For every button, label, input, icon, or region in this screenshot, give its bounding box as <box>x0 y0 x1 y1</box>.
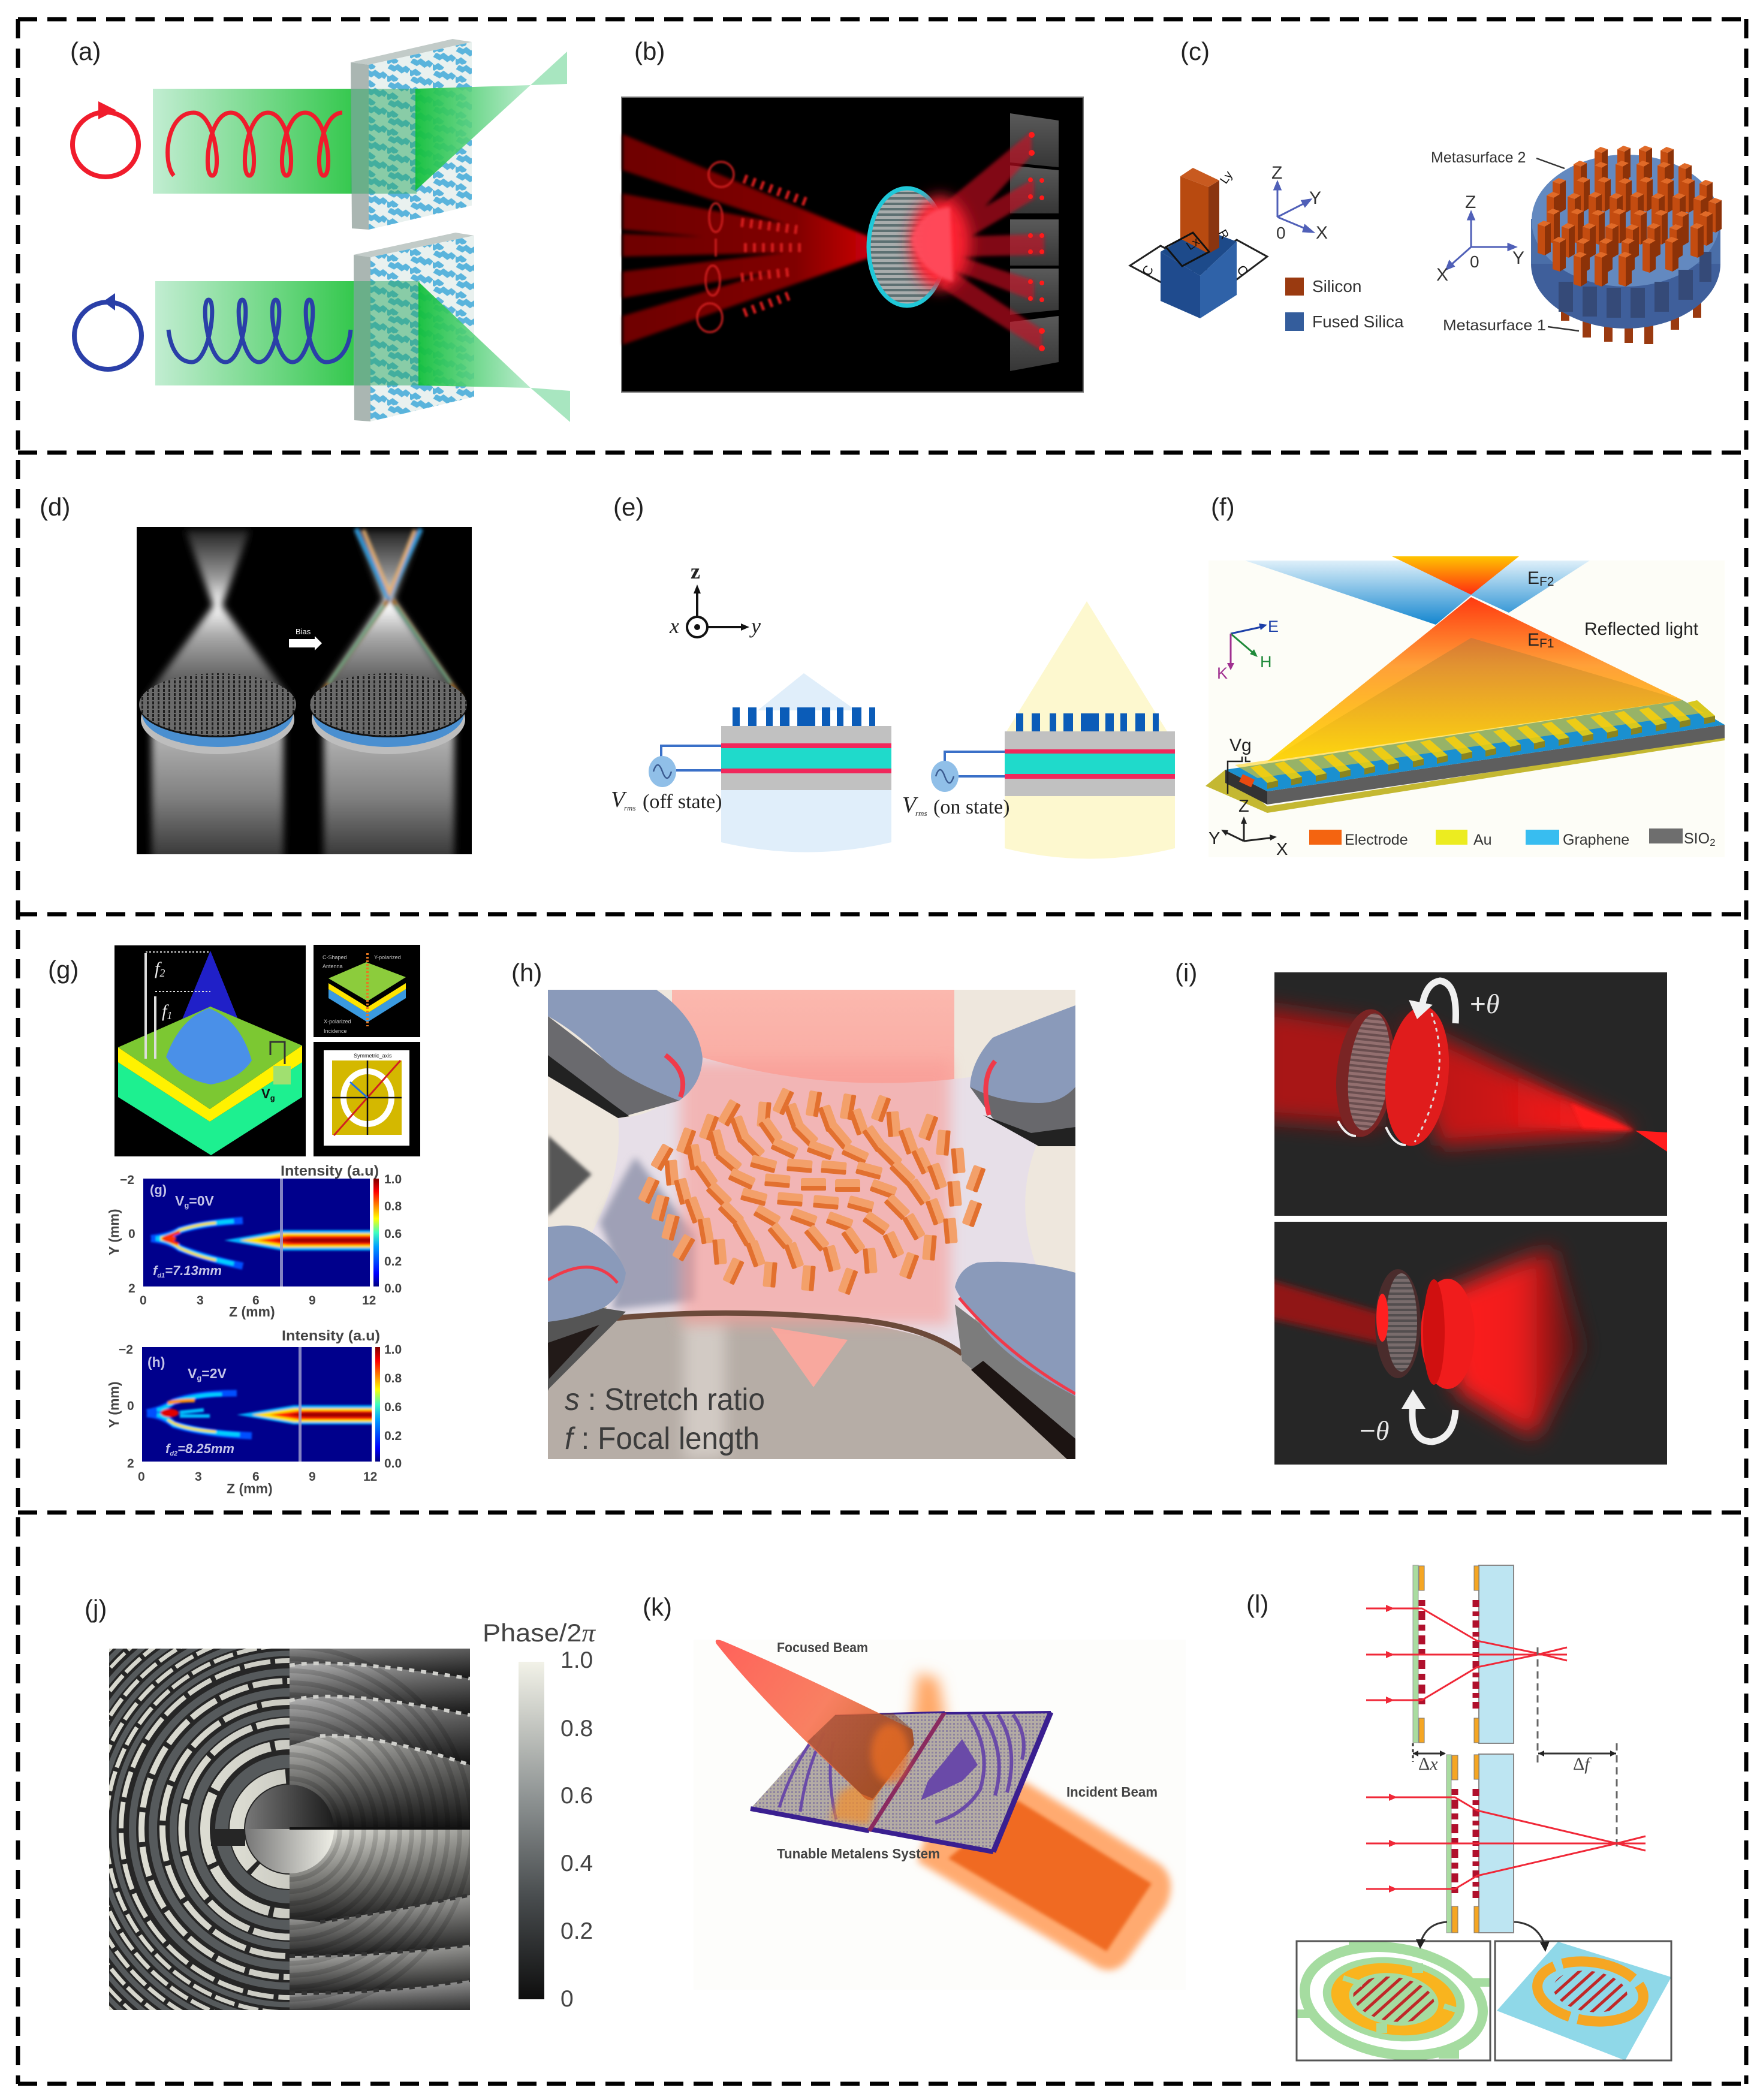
heatmap: Vg 0V: d1 <box>157 1272 165 1279</box>
on-state label: rms <box>915 809 927 818</box>
incident beams <box>152 728 284 866</box>
panel: (l) MEMS doublet metalens <box>1246 1565 1671 2069</box>
heatmap: Vg 0V <box>143 1179 372 1286</box>
inset: C-shaped antenna: Incidence <box>324 1028 347 1034</box>
pink focus triangle <box>771 1327 848 1387</box>
right half concentric shading <box>107 1647 472 2011</box>
heatmap: Vg 2V: V <box>188 1366 197 1381</box>
inset: C-shaped antenna: Antenna <box>323 963 343 969</box>
inset: fixed lens <box>1495 1941 1671 2060</box>
inset: C-shaped antenna: X-polarized <box>324 1019 351 1025</box>
unit cell: C <box>1234 262 1252 279</box>
E H K axes <box>1217 617 1279 682</box>
label d: (d) <box>40 493 70 521</box>
film shadow <box>599 1157 695 1310</box>
colorbar and axes for first heatmap: 0 <box>140 1294 147 1307</box>
dome <box>166 1008 252 1084</box>
top image +theta <box>1259 972 1667 1216</box>
colorbar and axes for first heatmap: 0.6 <box>384 1227 402 1241</box>
colorbar and axes for first heatmap: 0.0 <box>384 1282 402 1295</box>
heatmap: Vg 0V: (g) <box>150 1182 167 1197</box>
off-state label: rms <box>624 803 636 812</box>
on-state device <box>931 601 1175 858</box>
colorbar and axes for second heatmap: 12 <box>363 1470 377 1484</box>
legend: Au <box>1473 831 1492 848</box>
main 3D device on black: g <box>270 1093 275 1102</box>
main 3D device on black: V <box>261 1086 270 1101</box>
colorbar and axes for second heatmap: 3 <box>195 1470 202 1484</box>
legend: Electrode <box>1345 831 1408 848</box>
inset: C-shaped antenna <box>314 945 420 1037</box>
colorbar and axes for second heatmap: Z (mm) <box>227 1481 273 1496</box>
colorbar and axes for first heatmap: 0.2 <box>384 1255 402 1269</box>
legend: Fused Silica <box>1312 312 1404 331</box>
orange glow through plate <box>871 1724 909 1783</box>
coordinate axes left: Y <box>1309 188 1321 208</box>
colorbar and axes for first heatmap: 6 <box>252 1294 260 1307</box>
colorbar and axes for first heatmap: Y (mm) <box>106 1209 122 1255</box>
coordinate axes left <box>1271 163 1328 243</box>
colorbar and axes for second heatmap: 0 <box>127 1399 134 1413</box>
right output cone <box>314 530 463 700</box>
coordinate axes right: Y <box>1512 248 1524 268</box>
top rays <box>1366 1608 1567 1700</box>
E H K axes: E <box>1268 617 1279 635</box>
unit cell <box>1130 168 1267 318</box>
clamp bottom left <box>548 1225 626 1391</box>
bottom image -theta <box>1259 1222 1667 1465</box>
polarisation ellipses and waves <box>697 162 808 332</box>
left metalens disc <box>139 673 296 754</box>
displacement dimensions: Δf <box>1573 1754 1592 1774</box>
upper focused output beam <box>351 52 567 194</box>
curved arrows to insets <box>1416 1922 1550 1952</box>
right half upper phase bands <box>290 1649 470 1829</box>
heatmap: Vg 2V: d2 <box>170 1450 177 1457</box>
metalens nano-bricks <box>638 1087 986 1295</box>
axes x y z: z <box>691 559 700 583</box>
inset: C-shaped antenna: C-Shaped <box>323 954 347 960</box>
main 3D device on black <box>114 945 306 1156</box>
coordinate axes left: Z <box>1271 163 1282 183</box>
clamp bottom right <box>955 1262 1075 1459</box>
colorbar labels <box>483 1619 596 2012</box>
main 3D device on black: 1 <box>167 1010 172 1022</box>
blue helix wave <box>168 300 351 362</box>
colorbar and axes for second heatmap: 6 <box>252 1470 260 1484</box>
colorbar labels: 0.2 <box>560 1918 593 1944</box>
upper green beam <box>153 89 354 194</box>
focal length text: f : Focal length <box>565 1421 760 1456</box>
colorbar labels: 0.8 <box>560 1716 593 1742</box>
orange upper cone <box>1392 556 1519 595</box>
clamp top right <box>970 1005 1075 1146</box>
phase map <box>35 1575 544 2083</box>
coordinate axes right: 0 <box>1470 252 1479 271</box>
legend <box>1285 277 1404 331</box>
stretched film scene <box>548 990 1075 1459</box>
on-state label: V <box>902 793 918 818</box>
coordinate axes left: X <box>1316 223 1328 243</box>
label b: (b) <box>634 37 665 65</box>
label c: (c) <box>1180 37 1210 65</box>
panel: (d) achromatic metalens bias <box>40 493 472 866</box>
faint background <box>694 1640 1186 1990</box>
unit cell: Lx <box>1184 235 1202 253</box>
focal spots <box>1028 132 1045 351</box>
colorbar and axes for first heatmap: Intensity (a.u) <box>281 1163 379 1179</box>
colorbar and axes for first heatmap: 0 <box>128 1227 135 1241</box>
panel: (f) graphene reflective metalens <box>1206 493 1725 859</box>
colorbar and axes for second heatmap: 0.0 <box>384 1457 402 1471</box>
colorbar and axes for second heatmap: 2 <box>127 1457 134 1471</box>
label h: (h) <box>511 959 542 987</box>
E H K axes: K <box>1217 664 1228 682</box>
film lower edge <box>557 1313 962 1354</box>
device slab <box>118 1062 302 1155</box>
bottom image -theta: −θ <box>1360 1415 1389 1446</box>
legend: Graphene <box>1563 831 1629 848</box>
inset: MEMS actuator lens <box>1296 1933 1491 2069</box>
E H K axes: H <box>1260 653 1272 671</box>
inset: antenna geometry <box>314 1042 420 1156</box>
off-state label <box>611 787 722 813</box>
off-state label: (off state) <box>643 791 722 813</box>
on-state label: (on state) <box>933 796 1009 818</box>
off-state label: V <box>611 787 627 812</box>
axes x y z: x <box>669 614 679 638</box>
stretch ratio text: s : Stretch ratio <box>565 1382 765 1417</box>
main 3D device on black: f <box>162 1001 167 1021</box>
displacement dimensions <box>1413 1647 1617 1851</box>
EF1 label: F1 <box>1539 637 1554 650</box>
legend: 2 <box>1710 837 1716 848</box>
colorbar and axes for second heatmap: 0.8 <box>384 1372 402 1385</box>
top image +theta: +θ <box>1470 988 1499 1019</box>
colorbar labels: Phase/2 π <box>483 1619 596 1647</box>
panel: (e) liquid crystal metalens states <box>611 493 1175 858</box>
label l: (l) <box>1246 1590 1268 1618</box>
axes x y z <box>669 559 761 638</box>
screens with focal spots <box>1010 113 1059 371</box>
lower metasurface plate <box>354 233 474 421</box>
colorbar and axes for first heatmap: 0.8 <box>384 1200 402 1213</box>
panel: (b) multi-focus metalens on black <box>622 37 1083 392</box>
dark wedge <box>548 1135 592 1216</box>
metasurface 2 callout: Metasurface 2 <box>1431 149 1526 166</box>
panel: (i) rotating Moire metalens <box>1175 959 1667 1465</box>
EF1 label: E <box>1527 630 1539 650</box>
left half concentric phase rings <box>35 1575 544 2083</box>
blue reflected cone <box>1245 561 1590 625</box>
lower focused output beam <box>354 281 570 422</box>
sawtooth boundaries <box>290 1663 470 1993</box>
heatmap: Vg 2V <box>142 1347 375 1462</box>
heatmap: Vg 2V: (h) <box>147 1354 165 1370</box>
upper metasurface plate <box>351 39 472 230</box>
legend <box>1309 828 1716 848</box>
metasurface cylinder <box>1531 146 1722 344</box>
Vg electrode <box>1228 736 1252 794</box>
background <box>548 990 1075 1459</box>
colorbar and axes for first heatmap: 12 <box>362 1294 376 1307</box>
unit cell: C <box>1139 263 1156 278</box>
upper pillars <box>1538 146 1722 287</box>
heatmap: Vg 2V: g <box>197 1373 201 1382</box>
coordinate axes left: 0 <box>1276 224 1286 242</box>
colorbar and axes for second heatmap: 1.0 <box>384 1343 402 1357</box>
colorbar and axes for first heatmap <box>106 1163 402 1319</box>
bias arrow: Bias <box>296 627 311 636</box>
colorbar and axes for first heatmap: −2 <box>120 1173 134 1187</box>
XYZ axes: Z <box>1238 797 1249 816</box>
incident red beams <box>623 134 869 345</box>
rainbow dispersion edges <box>318 529 462 698</box>
label j: (j) <box>85 1595 107 1623</box>
clamp top left <box>548 990 703 1118</box>
colorbar and axes for first heatmap: Z (mm) <box>229 1304 275 1319</box>
colorbar and axes for second heatmap: 0 <box>138 1470 145 1484</box>
reflective device <box>1206 700 1725 813</box>
lower pillars <box>1561 294 1701 344</box>
label i: (i) <box>1175 959 1197 987</box>
Vg electrode: Vg <box>1229 736 1252 755</box>
panel: (j) phase profile <box>35 1575 596 2083</box>
heatmap: Vg 0V: f <box>153 1263 157 1278</box>
inset: antenna geometry: Symmetric_axis <box>354 1053 392 1059</box>
cream background <box>1209 561 1725 857</box>
panel: (c) bilayer metasurface schematic <box>1130 37 1722 344</box>
metasurface 2 callout <box>1431 149 1565 168</box>
right half lower phase bands <box>290 1829 470 2010</box>
output red ray bundles <box>941 131 1044 351</box>
beam labels: Focused Beam <box>777 1640 868 1655</box>
EF2 label: E <box>1527 568 1539 588</box>
label e: (e) <box>613 493 644 521</box>
left output cone <box>143 530 292 700</box>
colorbar labels: 0.4 <box>560 1851 593 1876</box>
heatmap: Vg 2V: =8.25mm <box>177 1441 234 1456</box>
focal arrows <box>146 952 210 1059</box>
unit cell: R <box>1216 228 1231 242</box>
black background <box>137 527 472 854</box>
metasurface 1 callout: Metasurface 1 <box>1443 317 1546 334</box>
inset: C-shaped antenna: Y-polarized <box>374 954 401 960</box>
coordinate axes right <box>1436 192 1524 285</box>
colorbar and axes for first heatmap: 2 <box>128 1282 135 1295</box>
colorbar and axes for second heatmap: 9 <box>309 1470 316 1484</box>
XYZ axes: Y <box>1209 829 1220 848</box>
panel: (g) varifocal metalens and intensity maps <box>48 945 420 1496</box>
colorbar labels: 0 <box>560 1986 574 2012</box>
colorbar and axes for second heatmap: −2 <box>119 1343 133 1357</box>
colorbar and axes for second heatmap: Y (mm) <box>106 1381 122 1428</box>
metalens disc <box>869 188 970 306</box>
colorbar and axes for first heatmap: 3 <box>197 1294 204 1307</box>
right metalens plate <box>869 1712 1051 1852</box>
colorbar labels: 0.6 <box>560 1783 593 1809</box>
panel: (a) chiral beams through metasurface <box>70 37 570 422</box>
colorbar and axes for second heatmap <box>106 1328 402 1496</box>
reflected light label: Reflected light <box>1584 619 1699 639</box>
beam labels: Incident Beam <box>1066 1784 1158 1800</box>
top configuration <box>1366 1565 1567 1743</box>
off-state device <box>649 673 891 852</box>
main 3D device on black: 2 <box>159 967 165 979</box>
central vortex disc <box>211 1785 470 1873</box>
colorbar and axes for first heatmap: 1.0 <box>384 1173 402 1186</box>
bottom configuration <box>1366 1754 1646 1933</box>
red helix wave <box>168 113 342 176</box>
pink beam top <box>672 990 954 1098</box>
heatmap: Vg 0V: =0V <box>189 1193 215 1209</box>
XYZ axes <box>1209 797 1288 859</box>
right metalens disc <box>310 673 467 754</box>
panel: (h) stretchable metalens <box>511 959 1075 1459</box>
XYZ axes: X <box>1276 840 1288 859</box>
main 3D device on black: f <box>155 959 159 978</box>
cylinder body <box>1531 199 1720 329</box>
heatmap: Vg 2V: =2V <box>201 1366 227 1381</box>
film <box>590 1055 1039 1350</box>
colorbar and axes for second heatmap: 0.2 <box>384 1429 402 1443</box>
pink light on film <box>680 1061 950 1325</box>
coordinate axes right: X <box>1436 265 1448 285</box>
on-state label <box>902 793 1009 818</box>
label a: (a) <box>70 37 101 65</box>
axes x y z: y <box>749 614 761 638</box>
label f: (f) <box>1211 493 1235 521</box>
icon: blue circular polarisation <box>74 293 141 369</box>
rotation arrow minus <box>1402 1390 1455 1442</box>
bias arrow <box>289 627 322 650</box>
coordinate axes right: Z <box>1465 192 1476 212</box>
heatmap: Vg 2V: f <box>165 1441 170 1456</box>
incident beam <box>911 1673 1171 1970</box>
large reflected cone <box>1267 597 1683 761</box>
legend: Silicon <box>1312 277 1361 296</box>
colorbar and axes for second heatmap: 0.6 <box>384 1400 402 1414</box>
heatmap: Vg 0V: V <box>175 1193 184 1209</box>
voltage source <box>270 1042 285 1064</box>
plate-beam overlap tint <box>807 1713 914 1798</box>
lower photo region <box>548 1307 1075 1459</box>
left metalens plate <box>751 1712 945 1831</box>
label g: (g) <box>48 956 79 984</box>
legend: SIO <box>1684 830 1710 847</box>
lower green beam <box>155 281 354 385</box>
focused beam <box>716 1640 914 1800</box>
beam labels: Tunable Metalens System <box>777 1846 940 1861</box>
EF2 label: F2 <box>1539 575 1554 589</box>
colorbar labels: 1.0 <box>560 1647 593 1673</box>
heatmap: Vg 0V: =7.13mm <box>165 1263 222 1278</box>
rotation arrow plus <box>1409 981 1455 1023</box>
inner reflected cone <box>1267 638 1683 761</box>
beam labels <box>777 1640 1158 1861</box>
black background <box>622 97 1083 392</box>
blue cone <box>182 951 238 1019</box>
bottom rays <box>1366 1797 1646 1889</box>
colorbar and axes for second heatmap: Intensity (a.u) <box>282 1328 380 1344</box>
panel: (k) tunable metalens system <box>643 1593 1186 1990</box>
heatmap: Vg 0V: g <box>184 1201 189 1210</box>
phase colorbar <box>519 1662 544 1999</box>
colorbar and axes for first heatmap: 9 <box>309 1294 316 1307</box>
optics scene <box>139 529 467 866</box>
metasurface 1 callout <box>1443 317 1579 334</box>
label k: (k) <box>643 1593 672 1621</box>
icon: red circular polarisation <box>73 101 138 177</box>
displacement dimensions: Δx <box>1418 1754 1438 1774</box>
unit cell: Ly <box>1217 169 1235 186</box>
embedded dim pillars <box>1559 252 1711 318</box>
